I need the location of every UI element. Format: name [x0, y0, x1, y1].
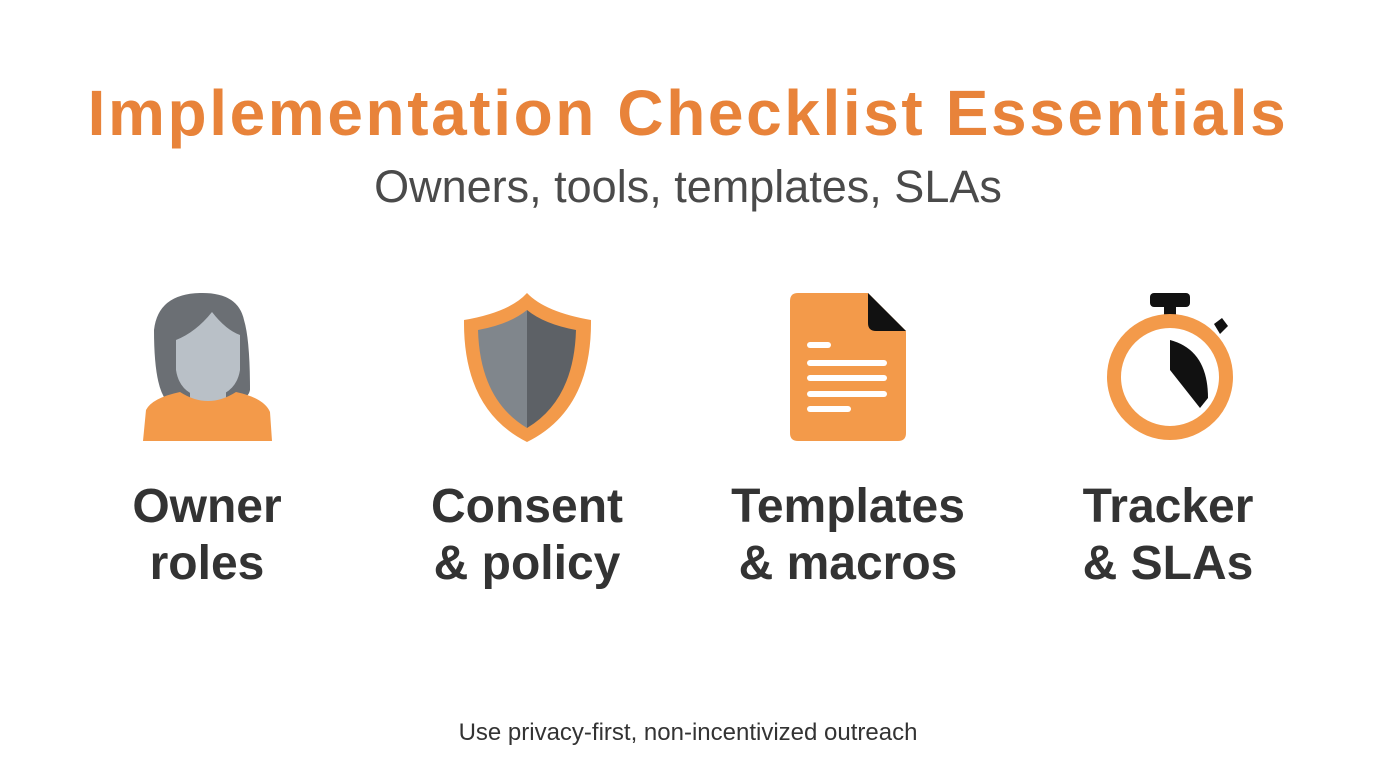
label: tracker: Tracker	[1083, 480, 1253, 533]
footer: Use privacy-first, non-incentivized outreach	[459, 719, 917, 746]
label: templates: Templates	[731, 480, 965, 533]
label: consent	[431, 480, 623, 590]
subtitle: Owners, tools, templates, SLAs	[374, 161, 1002, 212]
label: owner roles	[132, 480, 282, 590]
label: templates: & macros	[739, 537, 957, 590]
label: consent: & policy	[434, 537, 620, 590]
label: templates	[731, 480, 965, 590]
label: consent: Consent	[431, 480, 623, 533]
label: tracker	[1083, 480, 1253, 590]
label: owner roles: Owner	[132, 480, 282, 533]
label: tracker: & SLAs	[1083, 537, 1253, 590]
icon: stopwatch	[1107, 293, 1233, 440]
title: Implementation Checklist Essentials	[88, 77, 1288, 149]
icon: shield	[464, 293, 591, 442]
icon: person	[143, 293, 272, 441]
label: owner roles: roles	[150, 537, 264, 590]
icon: document	[790, 293, 906, 441]
